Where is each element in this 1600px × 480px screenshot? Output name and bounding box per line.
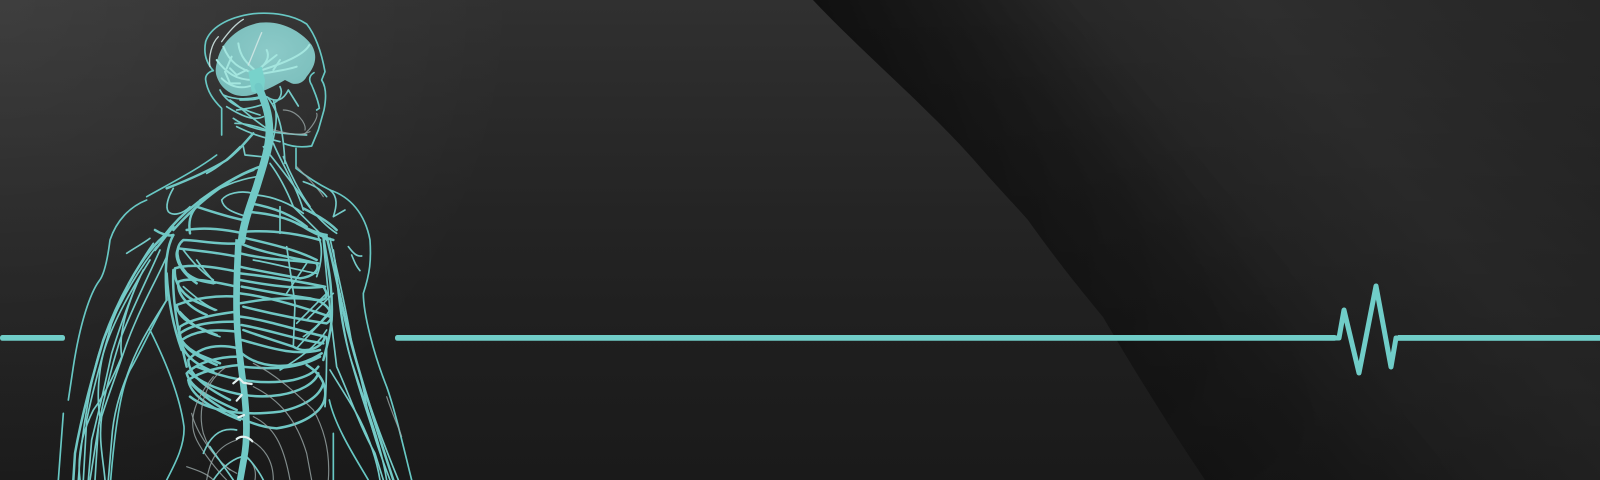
head and neck nerves [167,87,345,233]
pulse line: right segment [1398,335,1600,341]
background: panel lower shading [813,0,1600,480]
human figure with nervous system [58,13,412,480]
brain nerve branches [210,19,309,95]
pulse line: left segment [0,335,65,341]
spinal ganglia highlights [233,378,252,441]
rib nerves: left side [175,240,240,420]
rib nerves: right side [240,237,333,370]
body outline [58,13,412,480]
background: top-left glow [0,0,900,480]
brain [216,22,315,96]
right arm nerves [323,237,402,480]
shoulder to arm connectors [155,208,337,277]
lower rib cage arcs [167,237,332,428]
pulse line: long middle segment [395,335,1337,341]
spinal cord: chest to pelvis [236,239,247,480]
pulse line: heartbeat spike [1335,286,1400,373]
left arm nerves [73,235,173,480]
background: curved dark panel [813,0,1600,480]
spinal cord: head to chest [242,87,269,241]
abdominal nerves [187,363,329,480]
background: panel edge shadow [813,0,939,116]
shoulder nerves [163,167,333,240]
